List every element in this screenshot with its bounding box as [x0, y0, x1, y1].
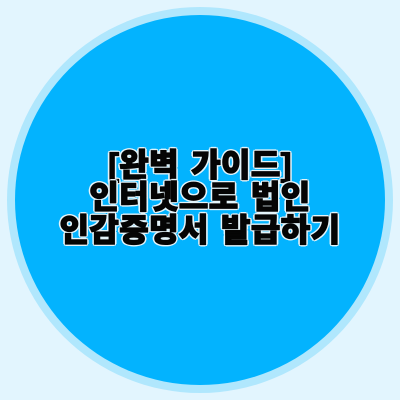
title: [완벽 가이드] — [108, 147, 292, 183]
title: 인감증명서 발급하기 — [60, 212, 340, 248]
title: 인터넷으로 법인 — [89, 179, 311, 215]
